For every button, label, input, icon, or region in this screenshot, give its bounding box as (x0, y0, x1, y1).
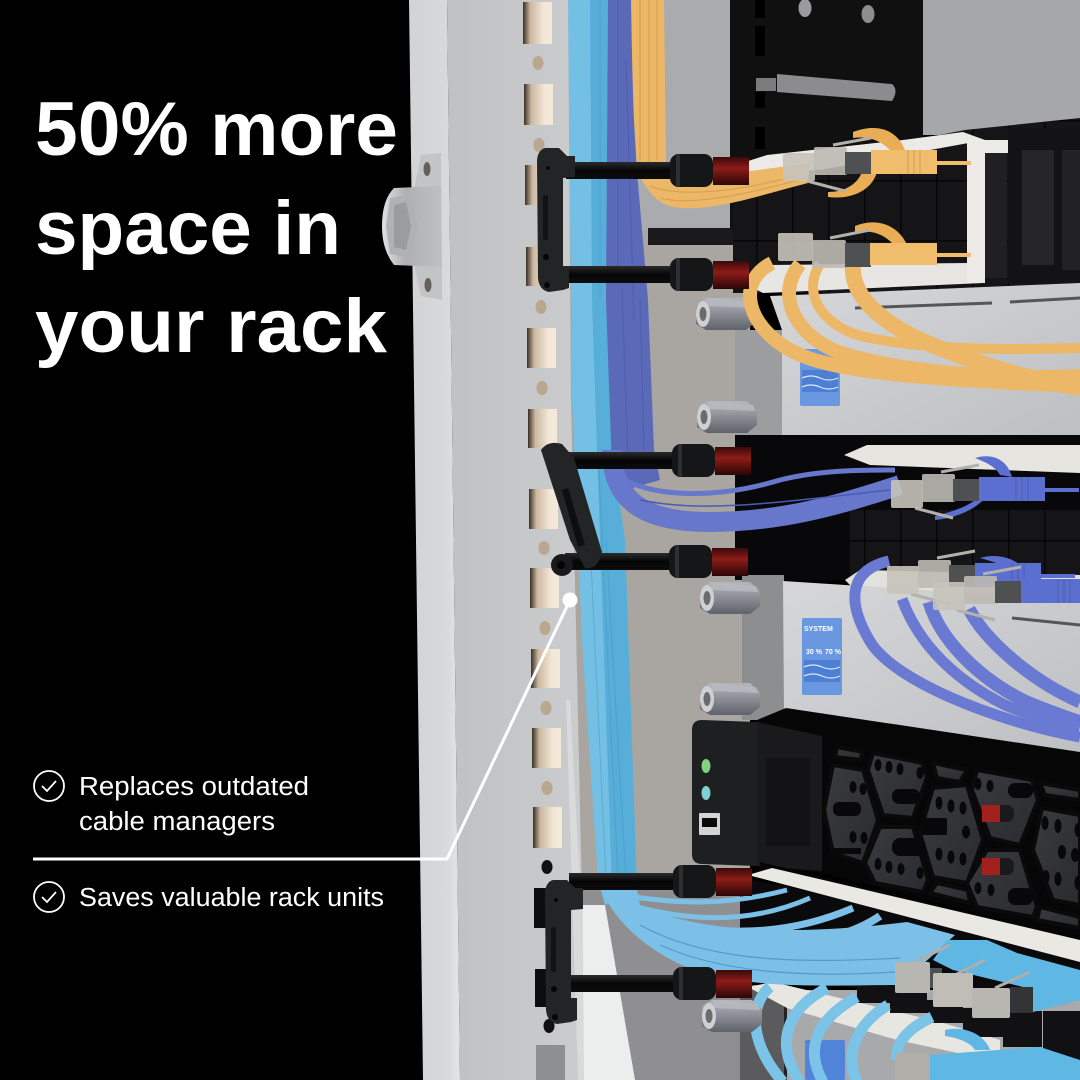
headline (35, 87, 398, 369)
cable bundle: light blue vertical (568, 0, 637, 905)
lower light blue connector (895, 1029, 1080, 1080)
lower device with white strip (740, 982, 1080, 1080)
blue status label two: 70 % (825, 649, 842, 656)
cable manager clip middle tilted (541, 443, 602, 568)
grey network device two (742, 575, 1080, 761)
benefit: replaces outdated cable managers: cable managers (79, 808, 275, 836)
rail round holes (532, 56, 554, 1033)
cable bundle: purple vertical (606, 0, 660, 490)
grey network device one (735, 283, 1080, 435)
purple cables to upper connector (612, 450, 900, 522)
headline: space in (35, 186, 341, 271)
screw head (551, 554, 573, 576)
PDU power strip (692, 708, 1080, 940)
mounting nuts on device two (700, 582, 760, 715)
upper right grey wall (920, 0, 1080, 135)
orange vertical and upper cable bundle (631, 0, 810, 208)
benefit: replaces outdated cable managers (34, 771, 309, 836)
purple lower flat cables (855, 561, 1080, 737)
mounting nuts on device one (696, 298, 757, 433)
upper standoffs (566, 154, 749, 291)
lower mounting nut (702, 1000, 762, 1032)
headline: 50% more (35, 87, 398, 172)
benefit: saves valuable rack units: Saves valuable rack units (79, 884, 384, 912)
rail mounting flange and nut (382, 153, 442, 300)
upper black patch panel (733, 118, 1080, 293)
light blue RJ45 connectors (895, 945, 1033, 1018)
black blocks under lower connectors (857, 978, 1080, 1060)
cable manager clip upper (537, 148, 575, 292)
blue status label two: SYSTEM (804, 626, 833, 633)
blue status label two: 30 % (806, 649, 823, 656)
benefit: replaces outdated cable managers: Replaces outdated (79, 773, 309, 801)
orange RJ45 connector bottom (778, 137, 971, 268)
orange lower flat cables (750, 263, 1080, 388)
black vertical bracket (730, 0, 923, 230)
headline: your rack (35, 284, 388, 369)
light blue cables fanning to lower connectors (598, 880, 955, 986)
lower status label (805, 1040, 845, 1080)
light blue RJ45 boots (933, 940, 1080, 1012)
purple RJ45 connector upper (891, 456, 1079, 520)
rear wall of the rack (560, 0, 750, 1080)
cable manager clip lower (545, 880, 583, 1024)
cable bundle: white strands lower (582, 905, 635, 1080)
blue status label one (800, 349, 840, 406)
light blue lower flat cables (755, 987, 932, 1080)
callout line and dot (33, 592, 578, 859)
rail square slots (523, 2, 565, 1080)
lower standoffs (569, 865, 752, 1000)
middle black patch panel (735, 435, 1080, 600)
lower patch panel and white strip (740, 862, 1080, 1000)
blue status label two (802, 618, 842, 695)
orange RJ45 connector top (783, 128, 971, 198)
purple RJ45 connectors lower (887, 551, 1080, 620)
rack rail (409, 0, 584, 1080)
middle standoffs (565, 444, 751, 578)
